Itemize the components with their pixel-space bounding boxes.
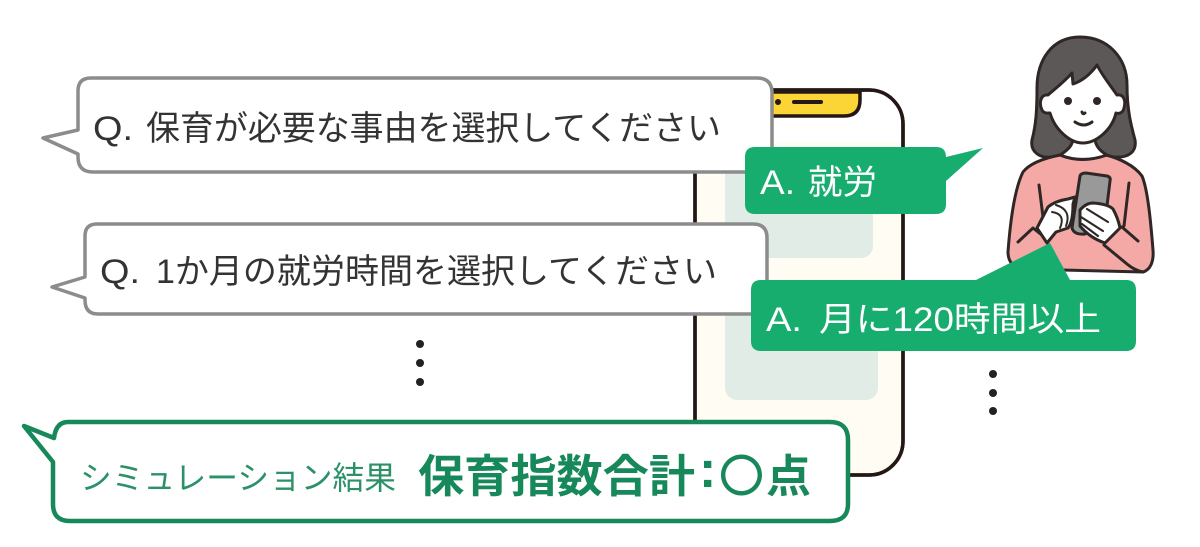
question bubble 1 <box>43 78 772 172</box>
right hand <box>1080 203 1120 243</box>
facial features <box>1064 97 1072 105</box>
smartphone illustration <box>695 90 903 475</box>
phone held in hands <box>1072 173 1110 234</box>
score colon: : <box>699 441 716 499</box>
answer bubble 2: A. <box>766 301 802 339</box>
ellipsis: answers continue <box>989 370 997 415</box>
question bubble 2 <box>52 224 767 314</box>
answer bubble 1: 就労 <box>808 164 877 202</box>
answer bubble 2 <box>751 243 1136 351</box>
question bubble 2: Q. <box>100 253 140 291</box>
simulation result bubble <box>24 422 848 521</box>
left hand <box>1037 197 1075 243</box>
question bubble 2: 1か月の就労時間を選択してください <box>156 253 717 291</box>
score placeholder circle: 〇 <box>719 451 764 502</box>
result label: シミュレーション結果 <box>80 460 396 496</box>
sleeve lines <box>1018 183 1143 272</box>
answer bubble 1: A. <box>760 164 795 202</box>
sweater <box>1008 155 1153 272</box>
neck and face <box>1060 138 1107 160</box>
question bubble 1: 保育が必要な事由を選択してください <box>146 110 721 148</box>
ellipsis: questions continue <box>416 340 424 386</box>
person using a smartphone <box>1008 37 1153 272</box>
hair <box>1032 37 1135 157</box>
question bubble 1: Q. <box>93 110 133 148</box>
answer bubble 2: 月に120時間以上 <box>819 301 1101 339</box>
answer bubble 1 <box>745 147 983 214</box>
score unit: 点 <box>766 451 811 502</box>
result score: 保育指数合計 <box>418 451 695 502</box>
